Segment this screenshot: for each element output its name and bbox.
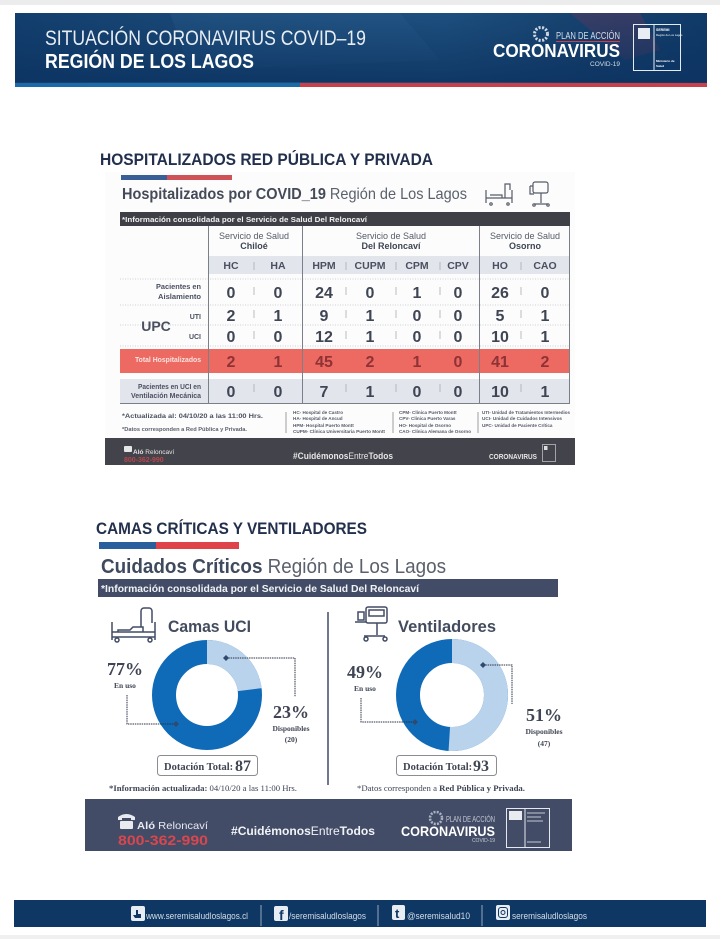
abbreviations legend: CPV- Clínica Puerto Varas [399,416,456,421]
abbreviations legend [286,410,570,434]
dotación total: 87 [158,756,258,776]
column sub-header: CPV [447,260,469,272]
row: ventilación mecánica values: 7 [320,384,329,401]
header logo: ministerio de salud: Salud [656,64,664,68]
header title: REGIÓN DE LOS LAGOS [45,49,254,73]
row: UTI values: 1 [541,308,550,325]
twitter: t [395,906,400,921]
accent bar [99,542,239,549]
dotación total: 87: 87 [235,758,251,775]
column sub-header: CAO [533,260,557,272]
row: total hospitalizados values: 2 [366,354,375,371]
header logo: plan de acción coronavirus: CORONAVIRUS [493,41,620,61]
row: ventilación mecánica values: 10 [491,384,509,401]
row: total hospitalizados values: 1 [413,354,422,371]
row labels [131,284,201,400]
note: datos corresponden: *Datos corresponden a Red Pública y Privada. [357,784,525,793]
phone line: 800-362-990 [118,832,208,848]
service headers: Servicio de Salud [490,231,560,241]
callout: 49% en uso [347,662,418,725]
column sub-header: HC [223,260,239,272]
abbreviations legend: CUPM- Clínica Universitaria Puerto Montt [293,429,385,434]
dotación total: 93: Dotación Total: [403,762,472,773]
row: UCI values [227,329,550,346]
table footer band [105,438,575,465]
header logo: plan de acción coronavirus: PLAN DE ACCIÓN [556,29,620,42]
callout: 23% disponibles: Disponibles [272,724,310,733]
header logo: plan de acción coronavirus [493,28,620,68]
abbreviations legend: HO- Hospital de Osorno [399,423,451,428]
info bar [120,212,570,226]
header title: SITUACIÓN CORONAVIRUS COVID–19 [45,27,366,50]
row: ventilación mecánica values: 0 [413,384,422,401]
twitter [392,905,470,921]
table footer band: 800-362-990 [124,457,164,464]
cell separators [254,262,521,392]
header logo: ministerio de salud: Región de Los Lagos [656,33,683,37]
divider [327,612,329,785]
row: pacientes en aislamiento values: 1 [413,285,422,302]
row: pacientes en aislamiento values: 26 [491,285,509,302]
facebook [274,906,366,923]
column sub-header [208,256,570,274]
row: UCI values: 1 [541,329,550,346]
callout: 77% en uso [107,659,179,727]
row: total hospitalizados values: 2 [227,354,236,371]
callout: 51% disponibles: 51% [526,705,562,725]
row: UCI values: 0 [454,329,463,346]
donut chart: camas UCI [164,652,250,738]
column sub-header: HO [492,260,508,272]
abbreviations legend: CAO- Clínica Alemana de Osorno [399,429,471,434]
row labels: Total Hospitalizados [135,357,201,364]
twitter: @seremisalud10 [407,911,470,921]
info bar: *Información consolidada por el Servicio de Salud Del Reloncaví [101,583,420,595]
row: pacientes en aislamiento values: 0 [541,285,550,302]
callout: 23% disponibles: (20) [285,735,298,744]
instagram [496,905,587,921]
row: ventilación mecánica values: 1 [541,384,550,401]
instagram: seremisaludloslagos [512,911,587,921]
sub-panel: camas UCI [107,608,310,793]
callout: 23% disponibles [223,655,310,744]
row: UCI values: 0 [274,329,283,346]
row: UTI values: 0 [413,308,422,325]
row: UCI values: 10 [491,329,509,346]
plan de acción coronavirus logo [401,812,495,844]
dotación total: 87: Dotación Total: [164,762,233,773]
abbreviations legend: UTI- Unidad de Tratamientos Intermedios [482,410,570,415]
panel: cuidados críticos [85,542,572,851]
header logo: ministerio de salud [634,24,683,70]
callout: 51% disponibles: (47) [538,739,551,748]
callout: 23% disponibles: 23% [273,702,309,722]
website [131,906,248,921]
row: UTI values: 1 [366,308,375,325]
row: UTI values: 1 [274,308,283,325]
row: total hospitalizados values: 0 [454,354,463,371]
row: total hospitalizados background [120,349,570,373]
table title: Hospitalizados por COVID_19 Región de Los Lagos [122,186,467,203]
column sub-header: CPM [405,260,429,272]
row: UCI values: 0 [227,329,236,346]
icon: hospital bed [486,184,512,205]
info bar [98,579,558,597]
dotación total: 93: 93 [473,758,489,775]
row labels: Pacientes en UCI en [138,384,201,391]
table footer band: CORONAVIRUS [489,452,537,461]
row: UCI values: 1 [366,329,375,346]
update note: *Actualizada al: 04/10/20 a las 11:00 Hrs. [122,413,263,420]
table footer band: #CuidémonosEntreTodos [293,451,393,461]
column sub-header: CUPM [355,260,386,272]
abbreviations legend: CPM- Clínica Puerto Montt [399,410,457,415]
row labels: UCI [189,334,201,341]
info bar: *Información consolidada por el Servicio de Salud Del Reloncaví [122,215,368,224]
service headers: Servicio de Salud [219,231,289,241]
phone line [118,820,208,848]
update note [122,413,263,433]
row: ventilación mecánica values: 1 [366,384,375,401]
header title [45,27,366,73]
row: UTI values [227,308,550,325]
service headers: Chiloé [240,241,268,251]
callout: 49% en uso: 49% [347,662,383,682]
heading: ventiladores: Ventiladores [398,617,496,636]
service headers [219,231,560,251]
icon: hospital bed [112,608,155,642]
row: total hospitalizados values: 45 [315,354,333,371]
panel footer band [85,799,572,851]
accent bar [121,175,232,180]
header logo: plan de acción coronavirus: COVID-19 [590,61,620,68]
plan de acción coronavirus logo: COVID-19 [472,838,495,844]
row: UCI values: 0 [413,329,422,346]
dotación total: 93 [396,756,496,776]
column sub-header: HPM [312,260,336,272]
service headers: Del Reloncaví [361,241,421,251]
plan de acción coronavirus logo: CORONAVIRUS [401,823,495,839]
row: ventilación mecánica values [227,384,550,401]
callout: 49% en uso: En uso [354,684,376,693]
row: total hospitalizados values: 2 [541,354,550,371]
row labels: UTI [190,314,201,321]
icon: ventilator [530,182,549,206]
abbreviations legend: UPC- Unidad de Paciente Crítica [482,423,553,428]
row: pacientes en aislamiento values: 0 [274,285,283,302]
icon: telephone [118,814,135,829]
header logo: ministerio de salud: SEREMI [656,28,669,32]
row labels: Pacientes en [156,284,201,291]
callout: 77% en uso: En uso [114,681,136,690]
row: ventilación mecánica values: 0 [454,384,463,401]
table footer band: Aló Reloncaví [133,449,174,456]
row labels: Ventilación Mecánica [131,393,201,400]
service headers: Osorno [509,241,541,251]
plan de acción coronavirus logo: PLAN DE ACCIÓN [446,815,495,824]
row: total hospitalizados values: 41 [491,354,509,371]
facebook: f [279,907,284,923]
column sub-header: HA [270,260,286,272]
row: UCI values: 12 [315,329,333,346]
row: ventilación mecánica values: 0 [227,384,236,401]
sub-panel: ventiladores [347,607,563,793]
callout: 51% disponibles [480,662,563,748]
row: UTI values: 0 [454,308,463,325]
row: pacientes en aislamiento values: 0 [454,285,463,302]
footer bar [14,900,706,927]
heading: camas UCI: Camas UCI [168,617,251,636]
abbreviations legend: HPM- Hospital Puerto Montt [293,423,354,428]
website: www.seremisaludloslagos.cl [145,911,248,921]
row: ventilación mecánica background [120,379,570,403]
heading: hospitalizados red pública y privada: HOSPITALIZADOS RED PÚBLICA Y PRIVADA [100,150,433,169]
facebook: /seremisaludloslagos [289,911,366,921]
row: pacientes en aislamiento values: 0 [227,285,236,302]
service headers: Servicio de Salud [356,231,426,241]
row: ventilación mecánica values: 0 [274,384,283,401]
callout: 51% disponibles: Disponibles [525,727,563,736]
header banner [15,13,707,87]
row: UTI values: 5 [496,308,505,325]
row: total hospitalizados values: 1 [274,354,283,371]
panel title: Cuidados Críticos Región de Los Lagos [101,556,446,578]
abbreviations legend: HA- Hospital de Ancud [293,416,343,421]
header logo: ministerio de salud: Ministerio de [656,59,675,63]
row: UTI values: 9 [320,308,329,325]
callout: 77% en uso: 77% [107,659,143,679]
abbreviations legend: UCI- Unidad de Cuidados Intensivos [482,416,562,421]
row: pacientes en aislamiento values: 0 [366,285,375,302]
panel: hospitalizados table [105,172,575,465]
row: pacientes en aislamiento values [227,285,550,302]
donut chart: ventiladores [408,651,496,739]
row: UTI values: 2 [227,308,236,325]
row: pacientes en aislamiento values: 24 [315,285,333,302]
note: información actualizada: *Información actualizada: 04/10/20 a las 11:00 Hrs. [109,784,297,793]
row labels: UPC [141,318,171,334]
abbreviations legend: HC- Hospital de Castro [293,410,343,415]
icon: ventilator [355,607,387,641]
row: total hospitalizados values [227,354,550,371]
ministerio logo [506,808,550,848]
row labels: Aislamiento [158,294,201,301]
column borders [120,226,570,404]
heading: camas críticas y ventiladores: CAMAS CRÍTICAS Y VENTILADORES [96,519,367,538]
update note: *Datos corresponden a Red Pública y Privada. [122,427,247,433]
row dividers [120,279,570,346]
hashtag: #CuidémonosEntreTodos [231,824,375,838]
phone line: Aló Reloncaví [137,820,208,832]
